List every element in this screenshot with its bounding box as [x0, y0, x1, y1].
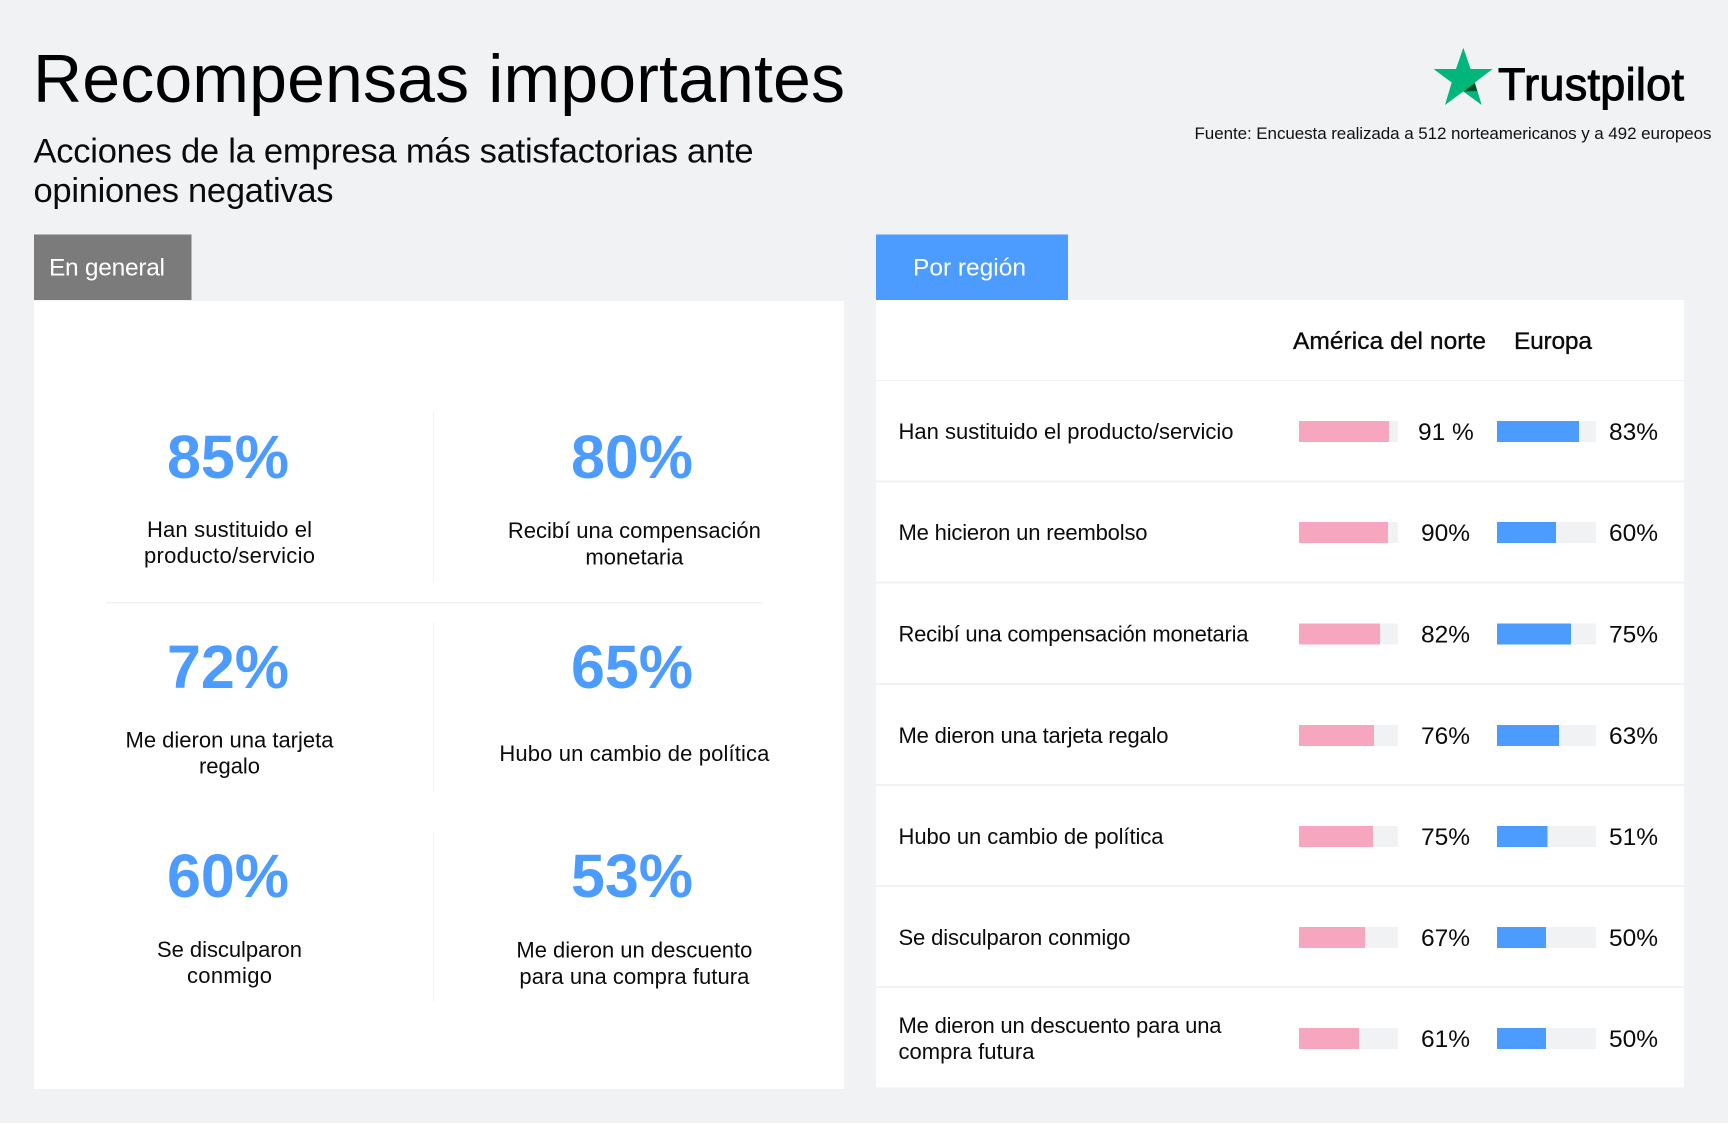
- logo wordmark: Trustpilot: [1498, 59, 1684, 110]
- row: Me dieron un descuento para una compra futura: 61%: [1421, 1026, 1470, 1053]
- row: Me dieron una tarjeta regalo: 76%: [1421, 723, 1470, 750]
- row: Han sustituido el producto/servicio: Han sustituido el producto/servicio: [898, 419, 1234, 444]
- row: Hubo un cambio de política: 75%: [1421, 824, 1470, 851]
- row: Recibí una compensación monetaria: 82%: [1421, 622, 1470, 648]
- stat: 72%: Me dieron una tarjeta: [126, 728, 334, 752]
- subtitle: [34, 132, 754, 210]
- tab: En general: [34, 234, 192, 300]
- row: Se disculparon conmigo: Se disculparon conmigo: [898, 925, 1130, 950]
- stat: 85%: producto/servicio: [144, 543, 315, 568]
- stat: 72%: [126, 633, 334, 778]
- stat: 60%: 60%: [167, 842, 289, 910]
- stat: 53%: 53%: [571, 842, 693, 910]
- row: Me dieron un descuento para una compra futura: 50%: [1609, 1026, 1658, 1053]
- panel: En general: [34, 301, 844, 1089]
- row: Me dieron un descuento para una compra futura: Me dieron un descuento para una: [898, 1013, 1222, 1038]
- column headers: Europa: [1514, 328, 1592, 355]
- icon: Trustpilot star: [1434, 48, 1493, 105]
- stat: 85%: Han sustituido el: [147, 517, 312, 542]
- logo: Trustpilot: [1434, 48, 1684, 110]
- row: Recibí una compensación monetaria: 75%: [1609, 622, 1658, 648]
- row: Han sustituido el producto/servicio: 91 %: [1418, 419, 1474, 446]
- row: Me hicieron un reembolso: [898, 520, 1658, 547]
- row: Me dieron una tarjeta regalo: Me dieron una tarjeta regalo: [898, 723, 1168, 748]
- row: Hubo un cambio de política: [898, 824, 1658, 851]
- row: Recibí una compensación monetaria: [898, 622, 1658, 648]
- stat: 80%: Recibí una compensación: [508, 518, 761, 543]
- tab: En general: En general: [49, 254, 165, 282]
- stat: 80%: [508, 423, 761, 570]
- source note: Fuente: Encuesta realizada a 512 norteamericanos y a 492 europeos: [1194, 124, 1712, 143]
- row: Se disculparon conmigo: [898, 925, 1658, 952]
- row: Se disculparon conmigo: 67%: [1421, 925, 1470, 952]
- subtitle: opiniones negativas: [34, 172, 334, 210]
- stat: 85%: [144, 423, 315, 568]
- stat: 65%: 65%: [571, 633, 693, 701]
- stat: 60%: Se disculparon: [157, 937, 302, 962]
- stat: 60%: [157, 842, 302, 988]
- row: Me hicieron un reembolso: Me hicieron un reembolso: [898, 520, 1148, 545]
- title: Recompensas importantes: [33, 41, 845, 117]
- row: Me dieron una tarjeta regalo: [898, 723, 1658, 750]
- row: Me dieron un descuento para una compra futura: [898, 1013, 1658, 1064]
- row: Me dieron una tarjeta regalo: 63%: [1609, 723, 1658, 750]
- stat: 80%: monetaria: [585, 544, 684, 570]
- panel: Por región: [876, 300, 1684, 1088]
- stat: 65%: [499, 633, 770, 766]
- stat: 53%: [516, 842, 752, 989]
- row: Han sustituido el producto/servicio: 83%: [1609, 419, 1658, 446]
- row: Hubo un cambio de política: Hubo un cambio de política: [898, 824, 1164, 849]
- row: Recibí una compensación monetaria: Recibí una compensación monetaria: [898, 622, 1249, 646]
- stat: 60%: conmigo: [187, 963, 272, 988]
- stat: 65%: Hubo un cambio de política: [499, 741, 770, 766]
- column headers: [1293, 328, 1592, 355]
- tab: Por región: [876, 234, 1068, 300]
- row: Me hicieron un reembolso: 90%: [1421, 520, 1470, 547]
- row: Han sustituido el producto/servicio: [898, 419, 1658, 446]
- stat: 85%: 85%: [167, 423, 289, 491]
- stat: 80%: 80%: [571, 423, 693, 491]
- column headers: América del norte: [1293, 328, 1486, 355]
- tab: Por región: Por región: [913, 254, 1026, 282]
- stat: 53%: Me dieron un descuento: [516, 938, 752, 962]
- subtitle: Acciones de la empresa más satisfactorias ante: [34, 132, 754, 170]
- stat: 53%: para una compra futura: [519, 964, 750, 989]
- row: Se disculparon conmigo: 50%: [1609, 925, 1658, 952]
- row: Me hicieron un reembolso: 60%: [1609, 520, 1658, 547]
- row: Me dieron un descuento para una compra futura: compra futura: [898, 1039, 1035, 1064]
- stat: 72%: regalo: [199, 754, 260, 778]
- stat: 72%: 72%: [167, 633, 289, 701]
- row: Hubo un cambio de política: 51%: [1609, 824, 1658, 851]
